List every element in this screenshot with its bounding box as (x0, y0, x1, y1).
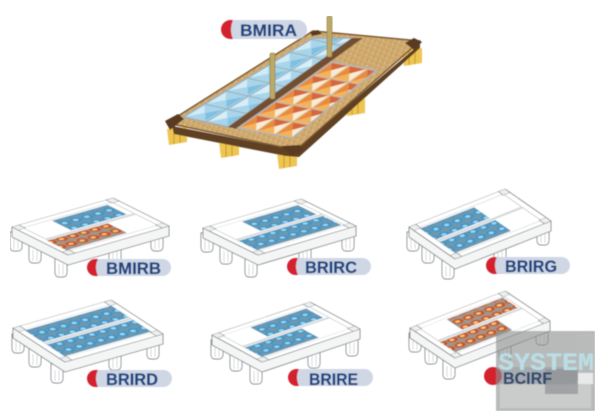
pallet: BRIRE (211, 302, 360, 384)
label: BMIRB (87, 259, 171, 278)
pallet feet (167, 48, 422, 169)
watermark: SYSTEM: SYSTEM (498, 349, 594, 378)
pallet: BCIRF (409, 291, 550, 379)
label: BMIRA (221, 20, 307, 40)
pallet: BRIRC (201, 199, 356, 277)
pallet: BRIRD (12, 300, 163, 383)
label: BRIRE (288, 369, 373, 389)
label: BRIRC (287, 258, 371, 277)
label: BMIRB: BMIRB (106, 260, 161, 278)
watermark: SYSTEM: BCIRF (503, 370, 552, 388)
illustration: BMIRA pallet (165, 16, 422, 169)
pallet: BMIRB (10, 198, 169, 277)
label: BCIRF (484, 367, 578, 385)
label: BRIRD: BRIRD (106, 371, 158, 389)
label: BRIRG (486, 257, 570, 276)
posts (270, 16, 332, 99)
label: BRIRD (87, 370, 172, 389)
watermark: SYSTEM (496, 331, 595, 411)
timber under-frame (172, 44, 420, 157)
label: BRIRG: BRIRG (505, 258, 557, 276)
label: BRIRE: BRIRE (309, 371, 358, 389)
cork deck (167, 31, 420, 150)
pallet: BRIRG (407, 189, 551, 279)
label: BRIRC: BRIRC (305, 259, 357, 277)
corner blocks (165, 30, 422, 156)
blue tray (183, 38, 353, 127)
orange tray (238, 62, 377, 138)
centre timber divider (228, 38, 363, 129)
label: BMIRA: BMIRA (240, 22, 297, 40)
